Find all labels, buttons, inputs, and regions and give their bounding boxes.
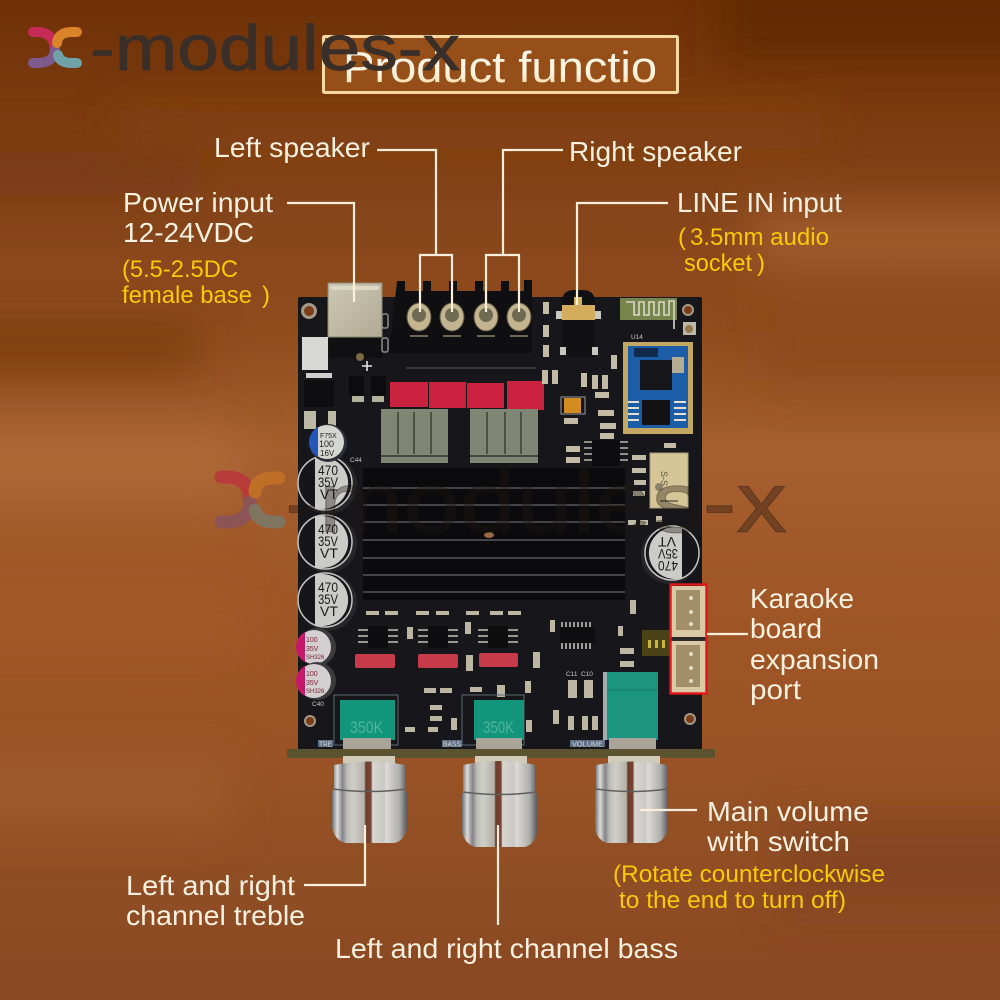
note: rotate to turn off: to the end to turn off): [619, 887, 846, 914]
orange tantalum capacitor: [561, 397, 585, 414]
small surface-mount parts lower area: [366, 600, 636, 732]
pink capacitor 1: [296, 628, 336, 666]
antenna pcb trace: [620, 298, 696, 335]
note: rotate to turn off: [613, 861, 885, 914]
small blue capacitor: 100: [319, 439, 334, 449]
pink capacitor 2: SH326: [306, 689, 325, 695]
leader: power input: [287, 203, 354, 302]
pink capacitor 1: SH326: [306, 655, 325, 661]
label: treble: channel treble: [126, 900, 305, 931]
label: bass: Left and right channel bass: [335, 933, 678, 964]
bluetooth module: [623, 342, 693, 434]
white smd pad and regulator: [302, 337, 386, 429]
pink capacitor 1: 35V: [306, 646, 319, 653]
label: treble: [126, 870, 305, 931]
electrolytic capacitor 470uF 3: 470: [318, 579, 338, 595]
electrolytic capacitor 470uF 2: VT: [320, 545, 338, 561]
silkscreen reference text: [312, 334, 643, 708]
mounting holes: [301, 303, 696, 727]
silkscreen reference text: C11: [566, 671, 578, 678]
electrolytic capacitor 470uF 2: 470: [318, 521, 338, 537]
pcb base: [298, 297, 702, 752]
silkscreen labels TRE BASS VOLUME: BASS: [443, 742, 461, 748]
treble potentiometer: [334, 695, 398, 750]
electrolytic capacitor 470uF 2: [298, 515, 357, 573]
electrolytic capacitor 470uF 3: VT: [320, 603, 338, 619]
signal relay: S-S: [659, 471, 669, 486]
leader: left speaker: [377, 150, 452, 312]
leader: line in: [577, 203, 668, 305]
large signal chip: [560, 622, 595, 649]
silkscreen labels TRE BASS VOLUME: VOLUME: [572, 742, 603, 748]
leader: karaoke port: [707, 633, 748, 635]
electrolytic capacitor 470uF rotated right: 35V: [657, 546, 678, 562]
treble potentiometer: 350K: [350, 718, 384, 737]
metal faceplate: [287, 749, 715, 758]
electrolytic capacitor 470uF 2: 35V: [318, 533, 339, 549]
note: audio socket: (: [678, 224, 686, 251]
label: power input: Power input: [123, 187, 273, 218]
label: main volume: Main volume: [707, 796, 869, 827]
electrolytic capacitor 470uF rotated right: 470: [658, 558, 678, 574]
note: audio socket: [678, 224, 829, 277]
label: power input: 12-24VDC: [123, 217, 254, 248]
silkscreen reference text: C10: [581, 671, 593, 678]
screw terminal block: [389, 280, 536, 368]
pink capacitor 2: 35V: [306, 680, 319, 687]
audio line-in jack: [556, 290, 601, 357]
bass potentiometer: [462, 695, 524, 750]
leader: right speaker: [486, 150, 563, 312]
note: power socket type: (5.5-2.5DC: [122, 256, 238, 283]
label: power input: [123, 187, 273, 248]
leader: main volume: [640, 809, 697, 811]
electrolytic capacitor 470uF 1: 35V: [318, 474, 339, 490]
watermark: centre modules-x text: -modules-x: [285, 455, 787, 551]
label: karaoke board expansion port: board: [750, 613, 822, 644]
dip switch: [642, 630, 670, 656]
label: karaoke board expansion port: [750, 583, 879, 705]
silkscreen reference text: C44: [350, 457, 362, 464]
label: right speaker: Right speaker: [569, 136, 742, 167]
watermark: top modules-x text: -modules-x: [90, 12, 460, 84]
label: line in input: LINE IN input: [677, 187, 842, 218]
small blue capacitor: 16V: [320, 449, 335, 458]
leader: bass: [497, 825, 499, 925]
aluminium heatsink: [363, 468, 625, 600]
volume potentiometer: [603, 672, 658, 750]
watermark: centre logo: [221, 477, 279, 522]
note: audio socket: socket: [684, 250, 752, 277]
bass knob: [462, 756, 537, 847]
amplifier circuit board photo: [287, 280, 715, 758]
label: karaoke board expansion port: expansion: [750, 644, 879, 675]
small blue capacitor: F75X: [320, 433, 337, 440]
pink capacitor 1: 100: [306, 637, 318, 644]
electrolytic capacitor 470uF rotated right: [641, 526, 699, 584]
pink capacitor 2: [296, 662, 336, 700]
ic chip near bluetooth: [584, 440, 628, 466]
treble knob: [332, 756, 407, 843]
note: power socket type: [122, 256, 270, 309]
note: audio socket: ): [757, 250, 765, 277]
note: audio socket: 3.5mm audio: [690, 224, 829, 251]
karaoke expansion connectors with red frame: [670, 584, 707, 694]
red tone capacitors: [355, 653, 518, 668]
label: treble: Left and right: [126, 870, 295, 901]
op-amp chips: [358, 626, 518, 648]
electrolytic capacitor 470uF 1: VT: [320, 486, 338, 502]
note: power socket type: female base: [122, 282, 252, 309]
dc power jack: [328, 283, 388, 361]
electrolytic capacitor 470uF 1: 470: [318, 462, 338, 478]
silkscreen reference text: U14: [631, 334, 643, 341]
small surface-mount parts upper right: [542, 302, 676, 525]
label: left speaker: Left speaker: [214, 132, 370, 163]
watermark: top logo: [33, 32, 77, 63]
title box: Product functio: Product functio: [343, 43, 657, 92]
bass potentiometer: 350K: [483, 718, 515, 737]
label: karaoke board expansion port: Karaoke: [750, 583, 854, 614]
electrolytic capacitor 470uF 3: [298, 573, 357, 631]
electrolytic capacitor 470uF rotated right: VT: [658, 534, 676, 550]
electrolytic capacitor 470uF 3: 35V: [318, 591, 339, 607]
small blue capacitor: [309, 424, 347, 462]
grey inductors: [381, 409, 538, 463]
silkscreen reference text: C40: [312, 701, 324, 708]
note: rotate to turn off: (Rotate counterclockwise: [613, 861, 885, 888]
signal relay: [650, 453, 688, 508]
note: power socket type: ): [262, 282, 270, 309]
volume knob: [595, 756, 668, 843]
label: main volume: with switch: [706, 826, 850, 857]
silkscreen labels TRE BASS VOLUME: TRE: [319, 742, 332, 748]
electrolytic capacitor 470uF 1: [298, 456, 357, 514]
red film capacitors: [390, 381, 544, 410]
silkscreen labels TRE BASS VOLUME: [318, 740, 605, 748]
pink capacitor 2: 100: [306, 671, 318, 678]
label: karaoke board expansion port: port: [750, 674, 801, 705]
leader: treble: [304, 825, 365, 885]
label: main volume: [706, 796, 869, 857]
